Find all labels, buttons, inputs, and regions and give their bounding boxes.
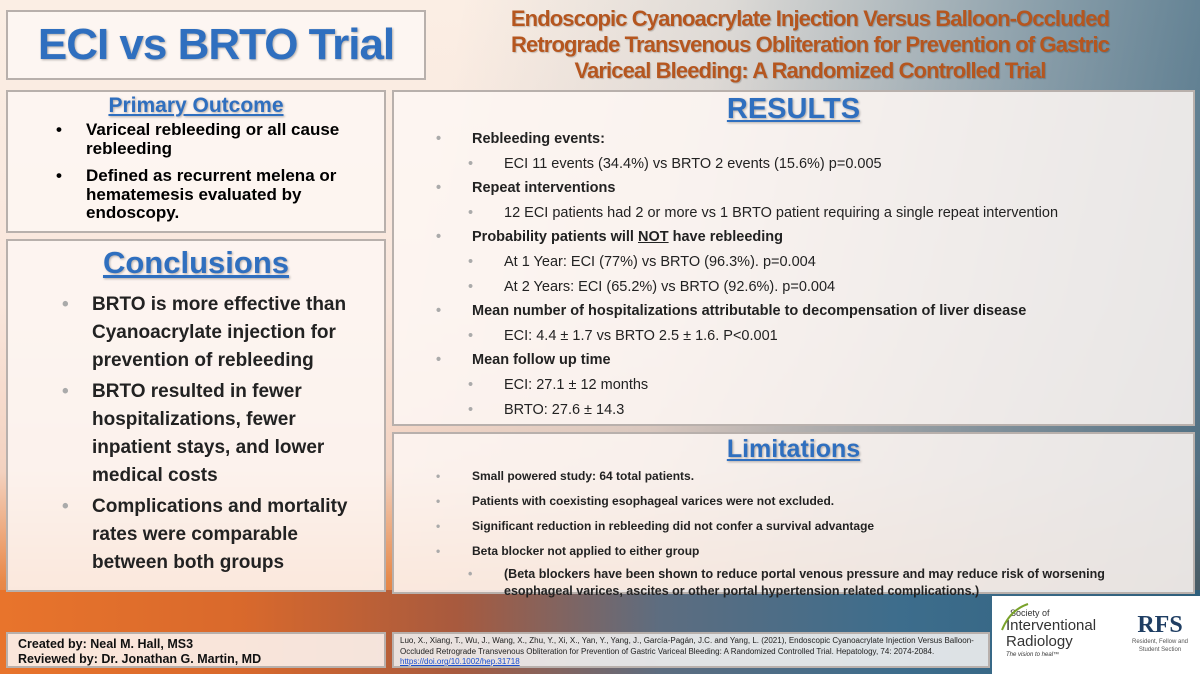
panel: primary outcome: Defined as recurrent melena or hematemesis evaluated by endoscopy. xyxy=(86,166,336,222)
logo: SIR: Society of xyxy=(1010,608,1050,618)
logo: SIR xyxy=(1001,603,1096,658)
credits box: Reviewed by: Dr. Jonathan G. Martin, MD xyxy=(18,652,261,666)
credits box: Created by: Neal M. Hall, MS3 xyxy=(18,637,193,651)
panel: primary outcome xyxy=(6,90,386,233)
panel: primary outcome: Variceal rebleeding or all cause rebleeding xyxy=(86,120,339,158)
subtitle xyxy=(511,6,1110,84)
heading: primary outcome: Primary Outcome xyxy=(108,94,284,117)
panel: limitations: (Beta blockers have been shown to reduce portal venous pressure and may reduce risk of worsening esophageal varices, ascites or other portal hypertension related complications.) xyxy=(504,567,1105,598)
panel: results: Repeat interventions xyxy=(472,180,615,196)
heading: limitations: Limitations xyxy=(727,435,860,463)
panel: results: ECI 11 events (34.4%) vs BRTO 2 events (15.6%) p=0.005 xyxy=(504,156,882,172)
logo: SIR: The vision to heal™ xyxy=(1006,652,1059,658)
panel: limitations: Patients with coexisting esophageal varices were not excluded. xyxy=(472,494,834,508)
panel: results: Rebleeding events: xyxy=(472,131,605,147)
credits box xyxy=(6,632,386,668)
panel: limitations: Small powered study: 64 total patients. xyxy=(472,469,694,483)
panel: results xyxy=(392,90,1195,426)
panel: conclusions: BRTO is more effective than Cyanoacrylate injection for prevention of rebleeding xyxy=(92,294,346,371)
panel: results: Probability patients will NOT have rebleeding xyxy=(472,229,783,245)
panel: results: At 2 Years: ECI (65.2%) vs BRTO (92.6%). p=0.004 xyxy=(504,279,835,295)
panel: results: Mean number of hospitalizations attributable to decompensation of liver disease xyxy=(472,303,1026,319)
panel: limitations: Significant reduction in rebleeding did not confer a survival advantage xyxy=(472,519,874,533)
logo: RFS: Resident, Fellow and Student Section xyxy=(1132,639,1188,653)
subtitle: Variceal Bleeding: A Randomized Controlled Trial xyxy=(574,58,1046,83)
panel: results: 12 ECI patients had 2 or more vs 1 BRTO patient requiring a single repeat intervention xyxy=(504,205,1058,221)
logo: SIR: Radiology xyxy=(1006,633,1073,650)
panel: results: Mean follow up time xyxy=(472,352,611,368)
panel: limitations xyxy=(392,432,1195,594)
panel: conclusions: BRTO resulted in fewer hospitalizations, fewer inpatient stays, and lower medical costs xyxy=(92,381,324,486)
heading: conclusions: Conclusions xyxy=(103,245,289,280)
panel: conclusions: Complications and mortality rates were comparable between both groups xyxy=(92,496,347,573)
panel: limitations: Beta blocker not applied to either group xyxy=(472,544,699,558)
citation box: Luo, X., Xiang, T., Wu, J., Wang, X., Zhu, Y., Xi, X., Yan, Y., Yang, J., García-Pagán, J.C. and Yang, L. (2021), Endoscopic Cyanoacrylate Injection Versus Balloon-Occluded Retrograde Transvenous Obliteration for Prevention of Gastric Variceal Bleeding: A Randomized Controlled Trial. Hepatology, 74: 2074-2084. https://doi.org/10.1002/hep.31718 xyxy=(400,636,974,666)
title box xyxy=(6,10,426,80)
title box: ECI vs BRTO Trial xyxy=(38,20,394,69)
panel: results: ECI: 27.1 ± 12 months xyxy=(504,377,648,393)
logo: SIR: Interventional xyxy=(1006,617,1096,634)
heading: results: RESULTS xyxy=(727,93,860,125)
panel: results: BRTO: 27.6 ± 14.3 xyxy=(504,402,624,418)
panel: results: ECI: 4.4 ± 1.7 vs BRTO 2.5 ± 1.6. P<0.001 xyxy=(504,328,778,344)
logos area xyxy=(992,596,1200,674)
logo: RFS xyxy=(1132,612,1188,653)
subtitle: Retrograde Transvenous Obliteration for Prevention of Gastric xyxy=(511,32,1109,57)
panel: results: At 1 Year: ECI (77%) vs BRTO (96.3%). p=0.004 xyxy=(504,254,816,270)
logo: RFS: RFS xyxy=(1137,612,1183,638)
panel: conclusions xyxy=(6,239,386,592)
subtitle: Endoscopic Cyanoacrylate Injection Versus Balloon-Occluded xyxy=(511,6,1109,31)
